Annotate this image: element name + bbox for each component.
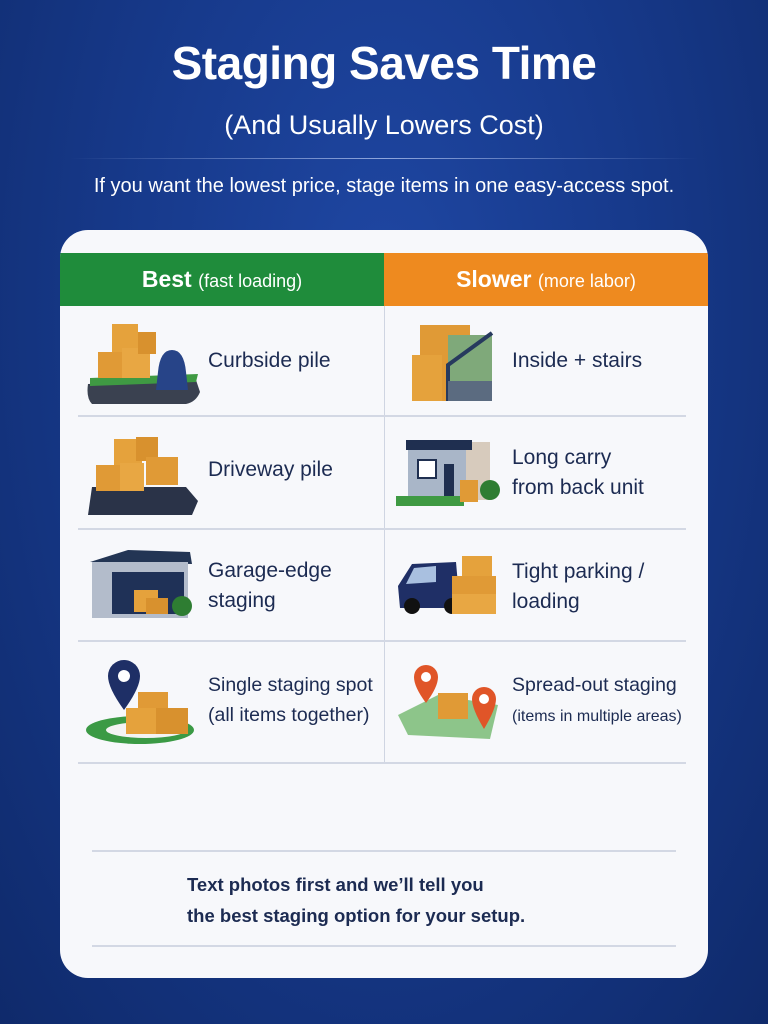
callout: text photos: the best staging option for your setup. xyxy=(187,905,525,926)
icon: inside stairs xyxy=(412,325,494,401)
text: long carry xyxy=(512,446,644,499)
header: slower: Slower (more labor) xyxy=(456,266,636,292)
icon: driveway pile xyxy=(88,437,198,515)
icon: single spot xyxy=(86,660,194,744)
header: slower xyxy=(384,253,708,306)
callout: text photos xyxy=(187,874,525,926)
text: garage-edge: staging xyxy=(208,589,276,612)
icon: curbside pile xyxy=(88,324,200,404)
icon: spread-out xyxy=(398,665,498,739)
text: tight parking xyxy=(512,560,644,613)
text: single spot: (all items together) xyxy=(208,704,369,726)
text: tight parking: loading xyxy=(512,590,580,613)
text: spread-out: Spread-out staging xyxy=(512,674,677,696)
header: best: Best (fast loading) xyxy=(142,266,302,292)
icon: tight parking xyxy=(398,556,496,614)
text: tight parking: Tight parking / xyxy=(512,560,644,583)
icon: long carry house xyxy=(396,440,500,506)
text: garage-edge: Garage-edge xyxy=(208,559,332,582)
text: driveway pile: Driveway pile xyxy=(208,458,333,481)
header: best xyxy=(60,253,384,306)
text: single spot: Single staging spot xyxy=(208,674,373,696)
text: inside stairs: Inside + stairs xyxy=(512,349,642,372)
text: spread-out: (items in multiple areas) xyxy=(512,708,682,725)
title: Staging Saves Time xyxy=(172,37,596,89)
text: long carry: Long carry xyxy=(512,446,611,469)
panel: comparison card xyxy=(60,230,708,978)
text: long carry: from back unit xyxy=(512,476,644,499)
text: single spot xyxy=(208,674,373,726)
subtitle: (And Usually Lowers Cost) xyxy=(224,110,544,140)
callout: text photos: Text photos first and we’ll tell you xyxy=(187,874,484,895)
icon: garage xyxy=(90,550,192,618)
tagline: If you want the lowest price, stage items in one easy-access spot. xyxy=(94,175,674,197)
text: garage-edge xyxy=(208,559,332,612)
text: curbside pile: Curbside pile xyxy=(208,349,331,372)
text: spread-out xyxy=(512,674,682,725)
